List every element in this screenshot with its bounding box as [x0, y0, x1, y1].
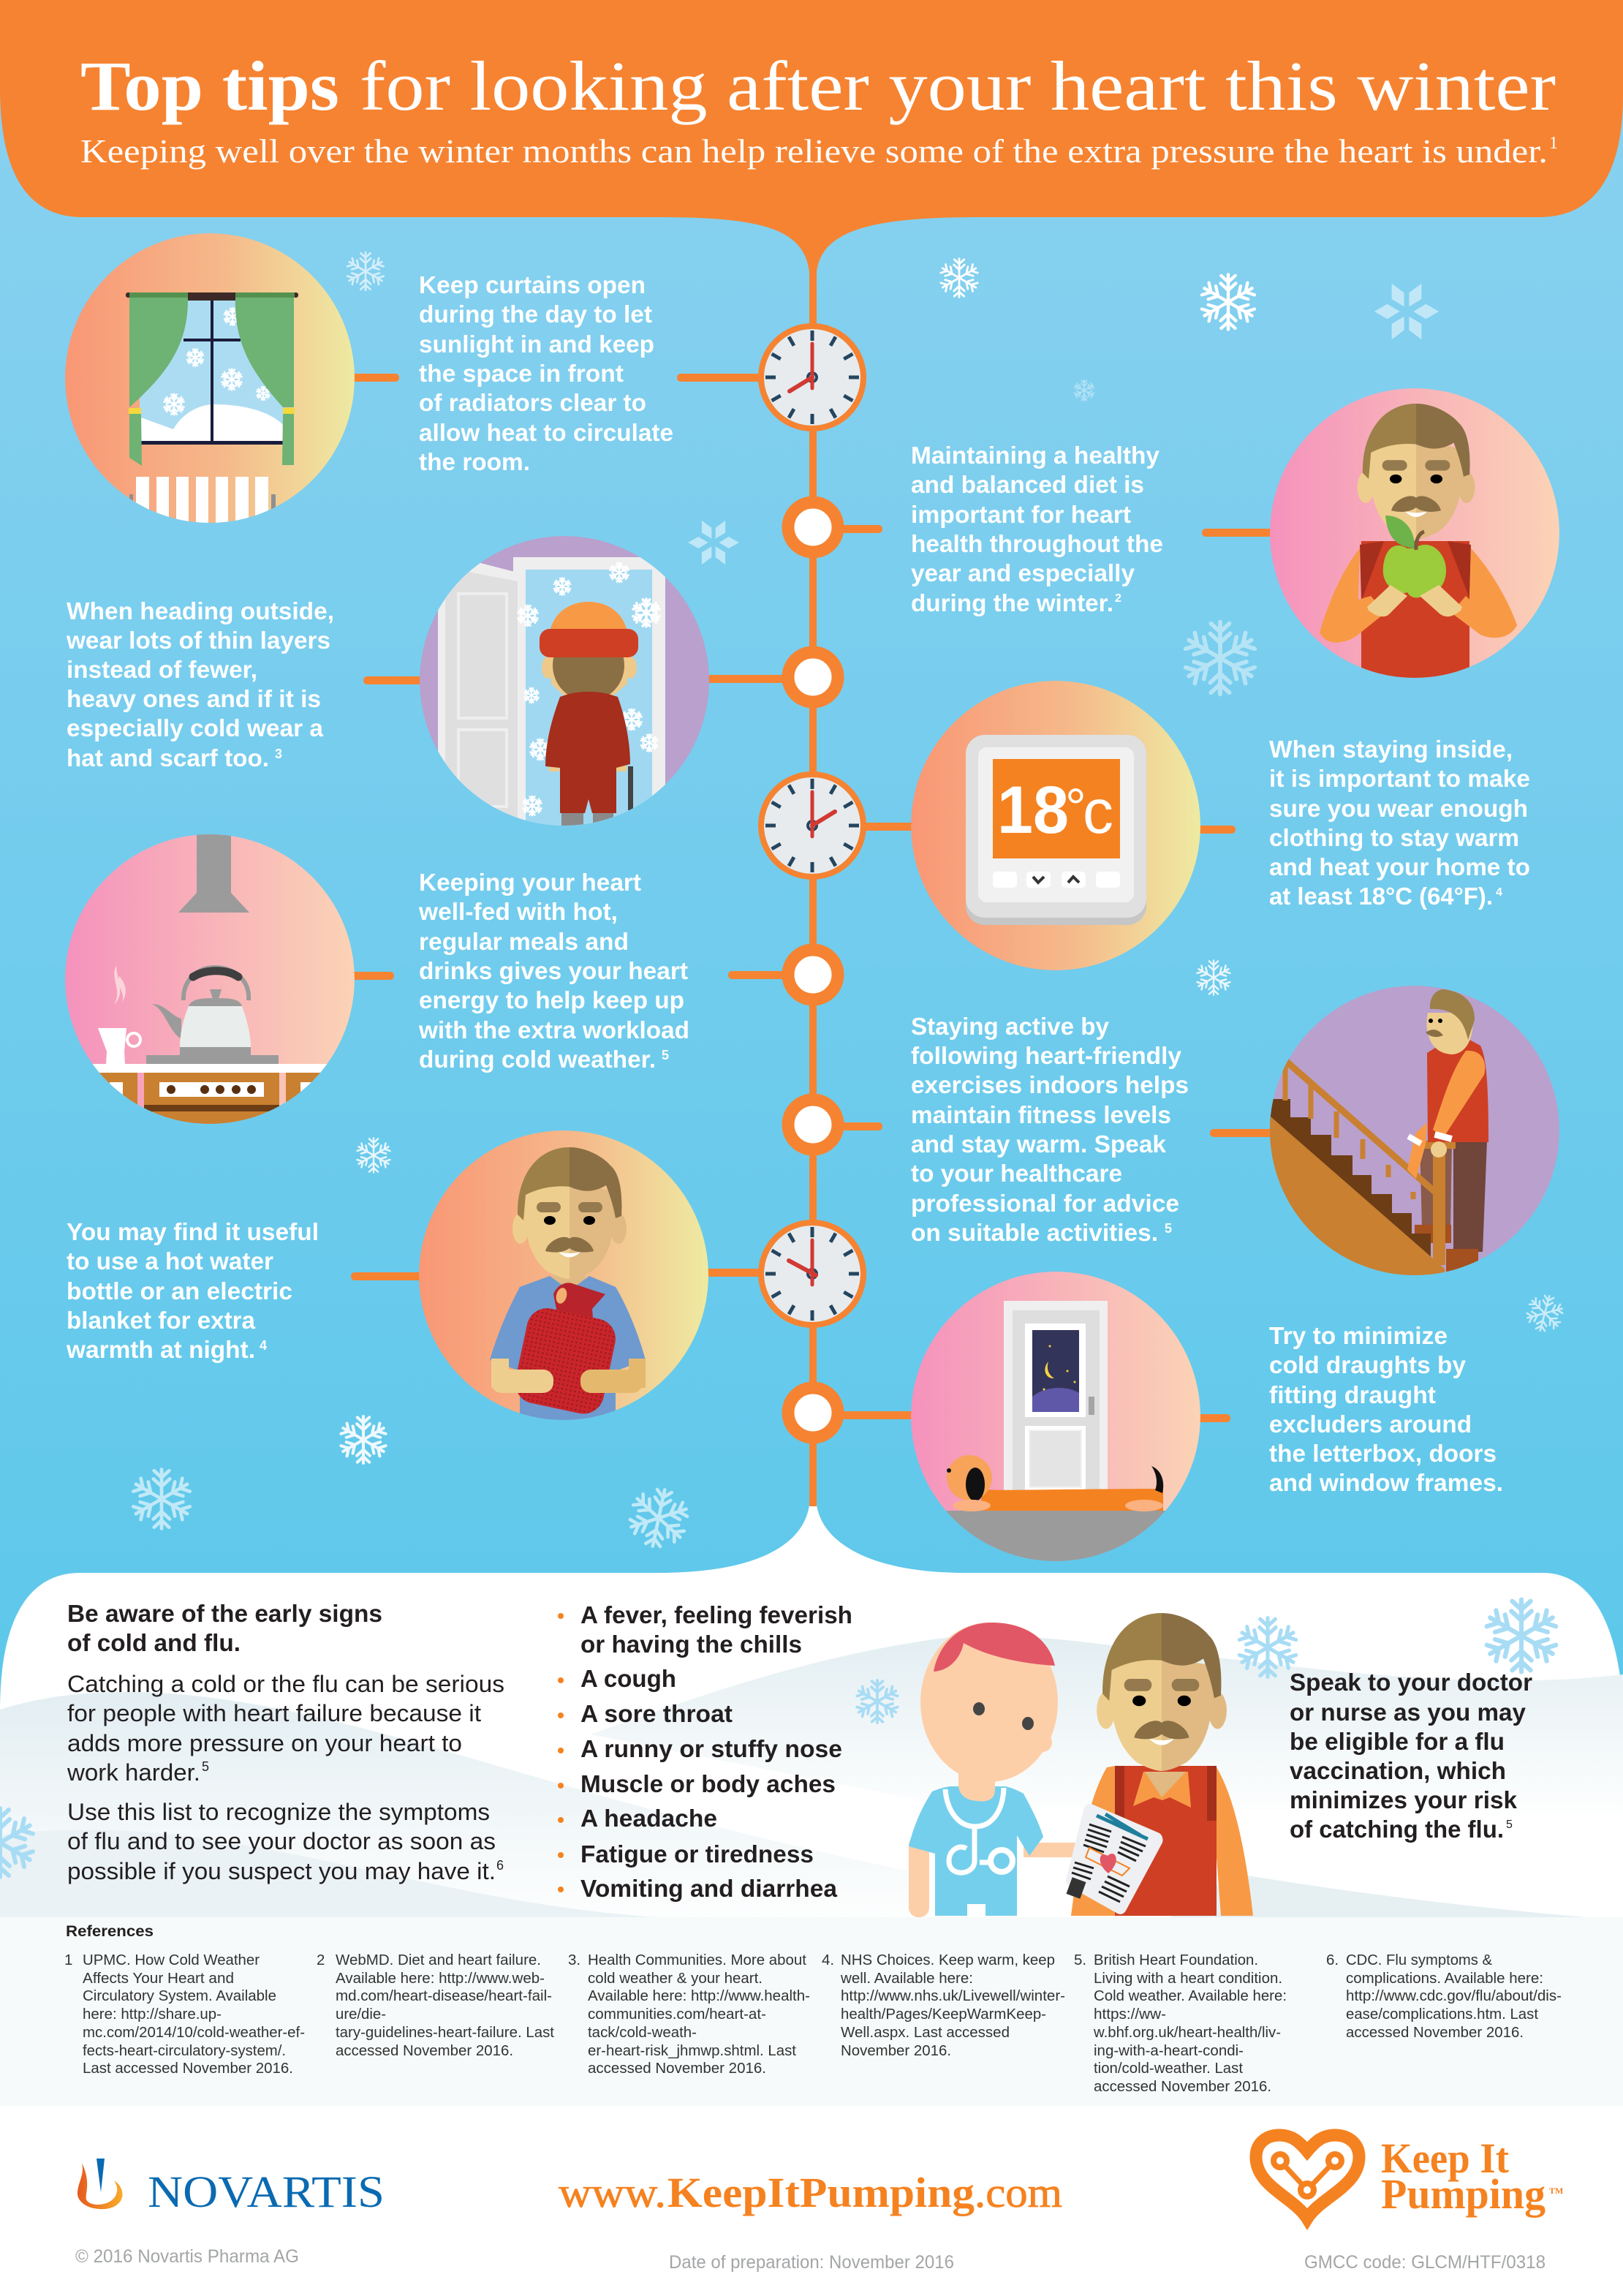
- text: curtains tip: the room.: [419, 449, 530, 476]
- reference 1: UPMC. How Cold Weather: [83, 1952, 260, 1968]
- reference 5: British Heart Foundation.: [1094, 1952, 1258, 1968]
- text: speak to your doctor: be eligible for a flu: [1290, 1729, 1505, 1756]
- text: staying active tip: maintain fitness levels: [911, 1102, 1171, 1129]
- GMCC code: GMCC code: GLCM/HTF/0318: [1304, 2252, 1546, 2273]
- reference 1: [64, 1952, 305, 2077]
- circle illustration: man climbing stairs: [1265, 986, 1559, 1287]
- copyright: © 2016 Novartis Pharma AG: [75, 2246, 299, 2267]
- text: layers tip: hat and scarf too.: [67, 745, 269, 772]
- ring nodes on timeline: [788, 502, 838, 1438]
- reference 1: here: http://share.up-: [83, 2006, 222, 2023]
- symptoms list: [558, 1602, 852, 1903]
- circle illustration: man holding apple: [1270, 388, 1559, 687]
- text: curtains tip: Keep curtains open: [419, 272, 646, 299]
- title: for looking after your heart this winter: [360, 47, 1556, 125]
- text: hot meals tip: 5: [662, 1048, 669, 1062]
- reference 5: https://ww-: [1094, 2006, 1166, 2023]
- text: staying inside tip: 4: [1496, 886, 1502, 899]
- reference 3: communities.com/heart-at-: [588, 2006, 766, 2023]
- reference 1: Circulatory System. Available: [83, 1987, 276, 2004]
- circle illustration: man with hot water bottle: [419, 1130, 708, 1426]
- symptoms list: A fever, feeling feverish: [580, 1602, 852, 1629]
- clock: 8 o'clock: [761, 326, 863, 428]
- text: speak to your doctor: Speak to your doctor: [1290, 1669, 1532, 1696]
- text: layers tip: heavy ones and if it is: [67, 686, 321, 713]
- text: diet tip: 2: [1115, 592, 1121, 605]
- text: hot meals tip: [418, 869, 689, 1073]
- reference 5: Cold weather. Available here:: [1094, 1987, 1287, 2004]
- text: cold and flu signs: 6: [496, 1858, 504, 1873]
- symptoms list: A cough: [580, 1666, 676, 1693]
- text: cold and flu signs: 5: [202, 1759, 209, 1774]
- website url: [559, 2169, 1062, 2216]
- symptoms list: or having the chills: [580, 1631, 802, 1658]
- reference 6: ease/complications.htm. Last: [1346, 2006, 1538, 2023]
- text: draughts tip: [1269, 1323, 1503, 1497]
- text: layers tip: instead of fewer,: [67, 657, 257, 684]
- reference 1: fects-heart-circulatory-system/.: [83, 2042, 286, 2059]
- subtitle: 1: [1549, 134, 1558, 153]
- circle illustration: thermostat 18 degrees: [911, 681, 1200, 970]
- text: cold and flu signs: [67, 1601, 504, 1884]
- circle illustration: person at open door: [420, 536, 709, 834]
- reference 6: 6.: [1326, 1952, 1339, 1968]
- reference 1: Last accessed November 2016.: [83, 2060, 293, 2077]
- reference 3: cold weather & your heart.: [588, 1970, 763, 1987]
- website url: KeepItPumping: [667, 2169, 975, 2216]
- text: cold and flu signs: for people with heart failure because it: [67, 1700, 481, 1726]
- reference 5: [1074, 1952, 1287, 2095]
- text: draughts tip: and window frames.: [1269, 1470, 1503, 1497]
- text: hot water bottle tip: blanket for extra: [67, 1307, 255, 1334]
- illustration: man with leaflet: [1066, 1613, 1253, 1916]
- reference 3: 3.: [568, 1952, 580, 1968]
- text: hot meals tip: with the extra workload: [418, 1017, 689, 1044]
- text: hot water bottle tip: to use a hot water: [67, 1248, 273, 1275]
- text: staying active tip: Staying active by: [911, 1013, 1109, 1041]
- reference 4: NHS Choices. Keep warm, keep: [841, 1952, 1055, 1968]
- reference 5: tion/cold-weather. Last: [1094, 2060, 1243, 2077]
- circle illustration: thermostat 18 degrees: c: [1083, 777, 1113, 847]
- reference 3: [568, 1952, 810, 2077]
- reference 3: tack/cold-weath-: [588, 2024, 697, 2041]
- logo: Keep It Pumping: Keep It: [1381, 2134, 1510, 2182]
- date of preparation: Date of preparation: November 2016: [669, 2252, 954, 2273]
- reference 2: accessed November 2016.: [336, 2042, 513, 2059]
- reference 4: well. Available here:: [840, 1970, 973, 1987]
- reference 5: Living with a heart condition.: [1094, 1970, 1282, 1987]
- reference 4: health/Pages/KeepWarmKeep-: [841, 2006, 1046, 2023]
- symptoms list: Fatigue or tiredness: [580, 1841, 814, 1868]
- references heading: References: [66, 1923, 154, 1940]
- text: layers tip: especially cold wear a: [67, 715, 323, 742]
- reference 2: ure/die-: [336, 2006, 386, 2023]
- text: layers tip: wear lots of thin layers: [66, 627, 330, 654]
- text: cold and flu signs: work harder.: [67, 1759, 200, 1786]
- reference 6: accessed November 2016.: [1346, 2024, 1524, 2041]
- text: diet tip: health throughout the: [911, 531, 1163, 558]
- illustration: doctor with stethoscope: [909, 1623, 1078, 1917]
- text: staying active tip: on suitable activities.: [911, 1220, 1158, 1247]
- reference 6: [1326, 1952, 1562, 2041]
- symptoms list: Muscle or body aches: [580, 1771, 836, 1798]
- symptoms list: A runny or stuffy nose: [580, 1736, 842, 1763]
- symptoms list: Vomiting and diarrhea: [580, 1876, 837, 1903]
- text: curtains tip: sunlight in and keep: [419, 331, 654, 358]
- logo: Novartis: [77, 2159, 385, 2217]
- clock: 10 o'clock: [761, 1223, 863, 1325]
- text: diet tip: and balanced diet is: [911, 472, 1144, 499]
- symptoms list: A headache: [580, 1805, 717, 1832]
- subtitle: Keeping well over the winter months can help relieve some of the extra pressure the heart is under.: [80, 132, 1548, 170]
- text: cold and flu signs: Use this list to recognize the symptoms: [67, 1799, 490, 1825]
- text: diet tip: Maintaining a healthy: [911, 442, 1159, 469]
- logo: Novartis: NOVARTIS: [148, 2168, 385, 2217]
- background: winter sky: [0, 0, 1623, 1828]
- snowflakes on white panel: [0, 1600, 1558, 1877]
- text: diet tip: year and especially: [911, 560, 1135, 587]
- text: hot water bottle tip: You may find it useful: [67, 1219, 319, 1246]
- text: curtains tip: the space in front: [419, 360, 624, 388]
- circle illustration: window and radiator: [65, 233, 355, 528]
- text: staying inside tip: sure you wear enough: [1269, 796, 1528, 823]
- reference 4: [822, 1952, 1065, 2059]
- text: hot meals tip: Keeping your heart: [419, 869, 641, 896]
- logo: Keep It Pumping: TM: [1549, 2186, 1563, 2196]
- text: speak to your doctor: of catching the flu.: [1290, 1816, 1504, 1843]
- circle illustration: door with draught excluder dog: [911, 1272, 1200, 1561]
- text: diet tip: important for heart: [911, 502, 1131, 529]
- logo: Keep It Pumping: [1256, 2134, 1563, 2218]
- text: hot meals tip: drinks gives your heart: [419, 958, 688, 985]
- text: diet tip: [911, 442, 1163, 617]
- reference 2: [317, 1952, 554, 2059]
- reference 6: http://www.cdc.gov/flu/about/dis-: [1346, 1987, 1562, 2004]
- text: curtains tip: of radiators clear to: [419, 390, 646, 417]
- reference 2: Available here: http://www.web-: [336, 1970, 545, 1987]
- text: staying active tip: professional for advice: [911, 1190, 1179, 1217]
- reference 2: md.com/heart-disease/heart-fail-: [336, 1987, 552, 2004]
- connector bars: [351, 374, 1276, 1422]
- text: staying active tip: [911, 1013, 1189, 1247]
- text: speak to your doctor: minimizes your risk: [1290, 1787, 1517, 1814]
- snowflakes on sky: [132, 252, 1567, 1552]
- reference 1: Affects Your Heart and: [83, 1970, 234, 1987]
- text: draughts tip: Try to minimize: [1269, 1323, 1448, 1350]
- text: layers tip: [66, 598, 334, 772]
- text: hot water bottle tip: bottle or an electric: [67, 1278, 292, 1305]
- symptoms list: A sore throat: [580, 1701, 733, 1728]
- reference 5: 5.: [1074, 1952, 1086, 1968]
- text: diet tip: during the winter.: [911, 590, 1113, 617]
- text: hot water bottle tip: 4: [260, 1338, 267, 1353]
- text: cold and flu signs: adds more pressure on your heart to: [67, 1730, 462, 1756]
- reference 3: Available here: http://www.health-: [588, 1987, 810, 2004]
- text: curtains tip: during the day to let: [419, 301, 652, 328]
- text: draughts tip: cold draughts by: [1269, 1352, 1466, 1379]
- text: hot meals tip: during cold weather.: [419, 1046, 656, 1073]
- text: layers tip: 3: [275, 747, 282, 761]
- reference 1: 1: [64, 1952, 72, 1968]
- text: speak to your doctor: 5: [1506, 1819, 1513, 1831]
- text: cold and flu signs: possible if you suspect you may have it.: [67, 1858, 496, 1884]
- reference 2: tary-guidelines-heart-failure. Last: [336, 2024, 554, 2041]
- website url: .com: [975, 2169, 1062, 2216]
- header banner: [0, 0, 1623, 272]
- text: staying inside tip: clothing to stay warm: [1269, 825, 1519, 852]
- text: speak to your doctor: vaccination, which: [1290, 1758, 1506, 1785]
- text: staying active tip: to your healthcare: [911, 1160, 1122, 1187]
- circle illustration: kettle and stove: [65, 834, 355, 1124]
- reference 3: accessed November 2016.: [588, 2060, 766, 2077]
- text: staying inside tip: When staying inside,: [1269, 736, 1513, 763]
- reference 5: ing-with-a-heart-condi-: [1094, 2042, 1244, 2059]
- text: layers tip: When heading outside,: [67, 598, 334, 625]
- text: staying inside tip: at least 18°C (64°F).: [1269, 883, 1493, 910]
- clock: 2 o'clock: [761, 774, 863, 877]
- text: cold and flu signs: of cold and flu.: [67, 1630, 241, 1657]
- text: staying active tip: and stay warm. Speak: [911, 1131, 1166, 1158]
- text: hot meals tip: well-fed with hot,: [418, 899, 618, 926]
- title: Top tips: [80, 47, 339, 125]
- text: speak to your doctor: or nurse as you may: [1290, 1699, 1526, 1726]
- text: cold and flu signs: Catching a cold or the flu can be serious: [67, 1671, 504, 1697]
- reference 4: http://www.nhs.uk/Livewell/winter-: [841, 1987, 1065, 2004]
- reference 6: CDC. Flu symptoms &: [1346, 1952, 1492, 1968]
- references band: [0, 1917, 1623, 2106]
- reference 6: complications. Available here:: [1346, 1970, 1543, 1987]
- text: draughts tip: excluders around: [1269, 1411, 1472, 1438]
- reference 4: November 2016.: [841, 2042, 951, 2059]
- reference 3: er-heart-risk_jhmwp.shtml. Last: [588, 2042, 796, 2059]
- text: speak to your doctor: [1290, 1669, 1532, 1843]
- text: staying inside tip: it is important to make: [1269, 766, 1530, 793]
- text: draughts tip: the letterbox, doors: [1269, 1440, 1497, 1468]
- text: cold and flu signs: of flu and to see your doctor as soon as: [67, 1828, 496, 1854]
- circle illustration: thermostat 18 degrees: 18: [997, 773, 1069, 847]
- timeline spine: [809, 263, 817, 1506]
- text: staying inside tip: [1269, 736, 1530, 910]
- text: cold and flu signs: Be aware of the early signs: [67, 1601, 382, 1628]
- reference 5: accessed November 2016.: [1094, 2078, 1271, 2095]
- reference 1: mc.com/2014/10/cold-weather-ef-: [83, 2024, 305, 2041]
- text: hot water bottle tip: warmth at night.: [66, 1337, 255, 1364]
- reference 4: Well.aspx. Last accessed: [841, 2024, 1010, 2041]
- text: staying active tip: following heart-friendly: [911, 1043, 1181, 1070]
- circle illustration: thermostat 18 degrees: °: [1065, 779, 1086, 837]
- text: hot water bottle tip: [66, 1219, 319, 1364]
- logo: Keep It Pumping: Pumping: [1381, 2170, 1546, 2218]
- reference 5: w.bhf.org.uk/heart-health/liv-: [1093, 2024, 1281, 2041]
- text: hot meals tip: regular meals and: [419, 929, 629, 956]
- text: hot meals tip: energy to help keep up: [419, 987, 684, 1014]
- text: staying active tip: exercises indoors helps: [911, 1072, 1189, 1099]
- text: staying inside tip: and heat your home to: [1269, 854, 1530, 881]
- text: staying active tip: 5: [1165, 1221, 1172, 1236]
- reference 3: Health Communities. More about: [588, 1952, 806, 1968]
- reference 2: WebMD. Diet and heart failure.: [336, 1952, 541, 1968]
- reference 2: 2: [317, 1952, 325, 1968]
- website url: www.: [559, 2169, 666, 2216]
- text: curtains tip: allow heat to circulate: [419, 420, 673, 447]
- text: curtains tip: [419, 272, 673, 476]
- reference 4: 4.: [822, 1952, 834, 1968]
- bottom white panel with snow hills: [0, 1505, 1623, 1923]
- text: draughts tip: fitting draught: [1269, 1382, 1436, 1409]
